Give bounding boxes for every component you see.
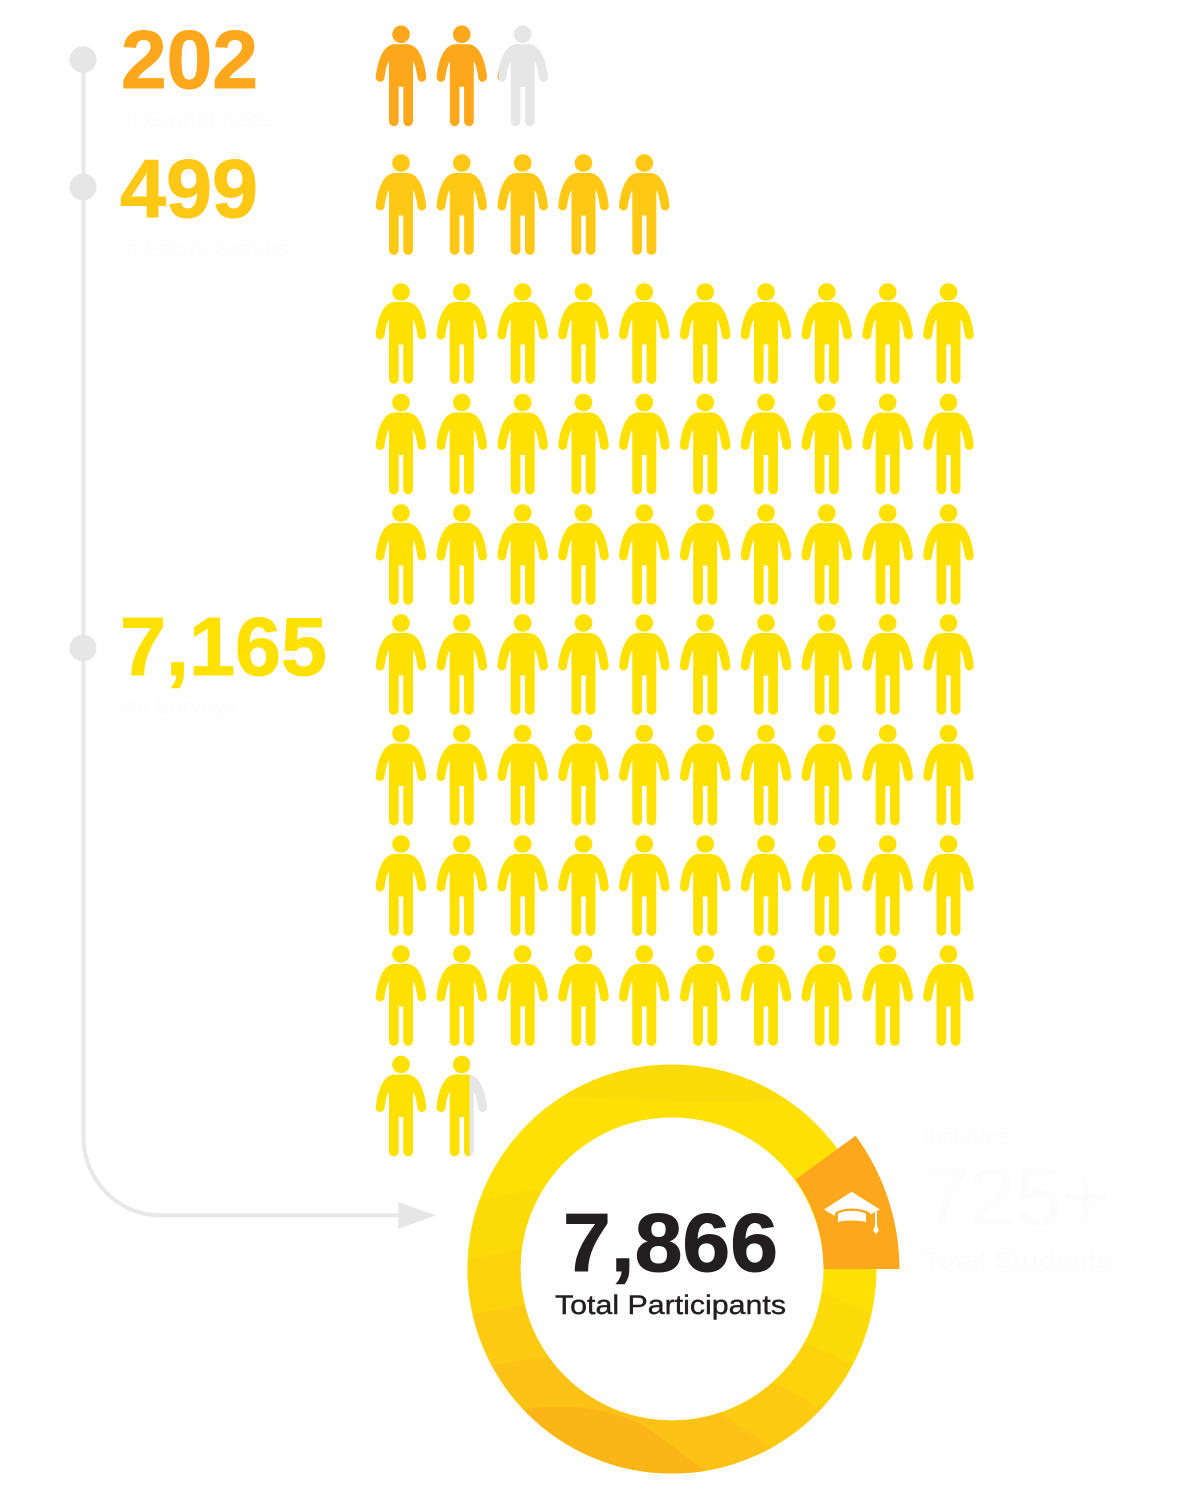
callout: includes 725+ total students: Total Students bbox=[923, 1247, 1112, 1275]
timeline marker: focus groups bbox=[70, 174, 96, 200]
icon: graduation cap bbox=[824, 1192, 880, 1234]
callout: includes 725+ total students: Includes bbox=[923, 1124, 1010, 1149]
stat: 202 in committees: in Committees bbox=[120, 107, 273, 132]
center label: 7,866 total participants: Total Participants bbox=[555, 1290, 786, 1320]
timeline connector with arrow bbox=[70, 46, 436, 1229]
stat: 499 in focus groups: in Focus Groups bbox=[120, 236, 289, 261]
center label: 7,866 total participants bbox=[555, 1196, 786, 1320]
stat: 499 in focus groups bbox=[120, 142, 289, 261]
donut chart: total participants ring bbox=[468, 1064, 876, 1474]
timeline marker: surveys bbox=[70, 634, 96, 662]
stat: 7,165 via surveys: via Surveys bbox=[120, 694, 236, 719]
donut segment: students wedge bbox=[796, 1136, 900, 1269]
callout: includes 725+ total students bbox=[923, 1124, 1112, 1275]
stat: 7,165 via surveys: 7,165 bbox=[120, 600, 327, 693]
stat: 202 in committees: 202 bbox=[121, 13, 258, 106]
pictogram row: committees bbox=[376, 26, 548, 126]
arrowhead bbox=[398, 1202, 436, 1229]
pictogram grid: surveys bbox=[376, 283, 974, 1156]
center label: 7,866 total participants: 7,866 bbox=[563, 1196, 778, 1289]
callout: includes 725+ total students: 725+ bbox=[923, 1152, 1110, 1243]
stat: 499 in focus groups: 499 bbox=[120, 142, 258, 235]
pictogram row: focus groups bbox=[376, 154, 670, 255]
timeline marker: committees bbox=[70, 46, 96, 73]
